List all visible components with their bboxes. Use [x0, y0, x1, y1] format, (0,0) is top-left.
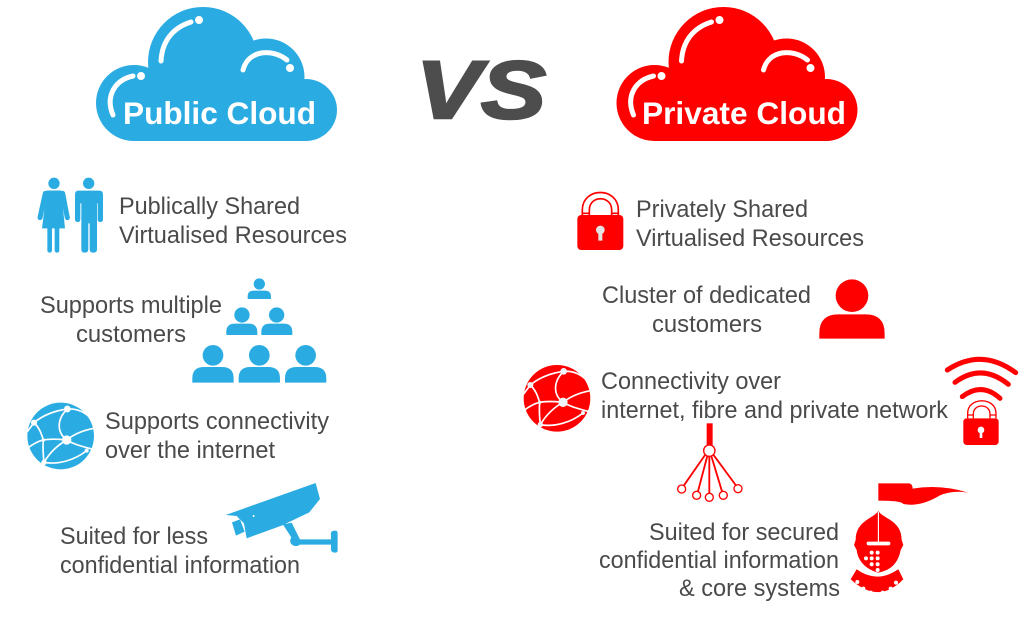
cloud shape — [616, 7, 858, 141]
icon: wifi padlock — [947, 359, 1016, 445]
row: publically shared — [40, 178, 347, 253]
heading text: Public Cloud — [123, 95, 316, 131]
text: Suited for secured — [649, 519, 839, 546]
icon: network globe — [27, 403, 94, 469]
icon: security camera — [226, 483, 338, 553]
icon: people pyramid — [192, 278, 326, 383]
text: customers — [652, 311, 762, 338]
text: Virtualised Resources — [636, 225, 864, 252]
icon: fibre optic — [678, 423, 742, 501]
text: Privately Shared — [636, 196, 808, 223]
icon: single person — [819, 279, 885, 339]
heading text: Private Cloud — [642, 95, 846, 131]
panel: public cloud — [27, 7, 347, 579]
heading: VS: VS — [416, 45, 546, 136]
text: customers — [76, 321, 186, 348]
icon: woman and man — [40, 178, 103, 253]
text: confidential information — [599, 547, 839, 574]
text: internet, fibre and private network — [601, 397, 949, 424]
cloud highlights — [631, 18, 812, 115]
heading cloud: Private Cloud — [616, 7, 858, 141]
text: Virtualised Resources — [119, 222, 347, 249]
row: connectivity — [524, 359, 1016, 501]
text: confidential information — [60, 552, 300, 579]
panel: private cloud — [524, 7, 1016, 602]
row: less confidential — [60, 483, 338, 579]
icon: network globe — [524, 365, 590, 432]
cloud shape — [96, 7, 337, 141]
heading cloud: Public Cloud — [96, 7, 337, 141]
text: Cluster of dedicated — [602, 282, 811, 309]
icon: knight helmet with plume — [851, 483, 968, 595]
text: Supports multiple — [40, 292, 222, 319]
row: connectivity — [27, 403, 329, 469]
text: Suited for less — [60, 523, 208, 550]
text: & core systems — [679, 575, 840, 602]
text: Supports connectivity — [105, 408, 329, 435]
row: privately shared — [577, 192, 864, 252]
row: multiple customers — [40, 278, 326, 383]
text: Connectivity over — [601, 368, 781, 395]
text: Publically Shared — [119, 193, 300, 220]
row: dedicated customers — [602, 279, 885, 339]
cloud highlights — [110, 18, 292, 115]
row: secured confidential — [599, 483, 968, 602]
icon: padlock — [577, 192, 623, 250]
text: over the internet — [105, 437, 275, 464]
